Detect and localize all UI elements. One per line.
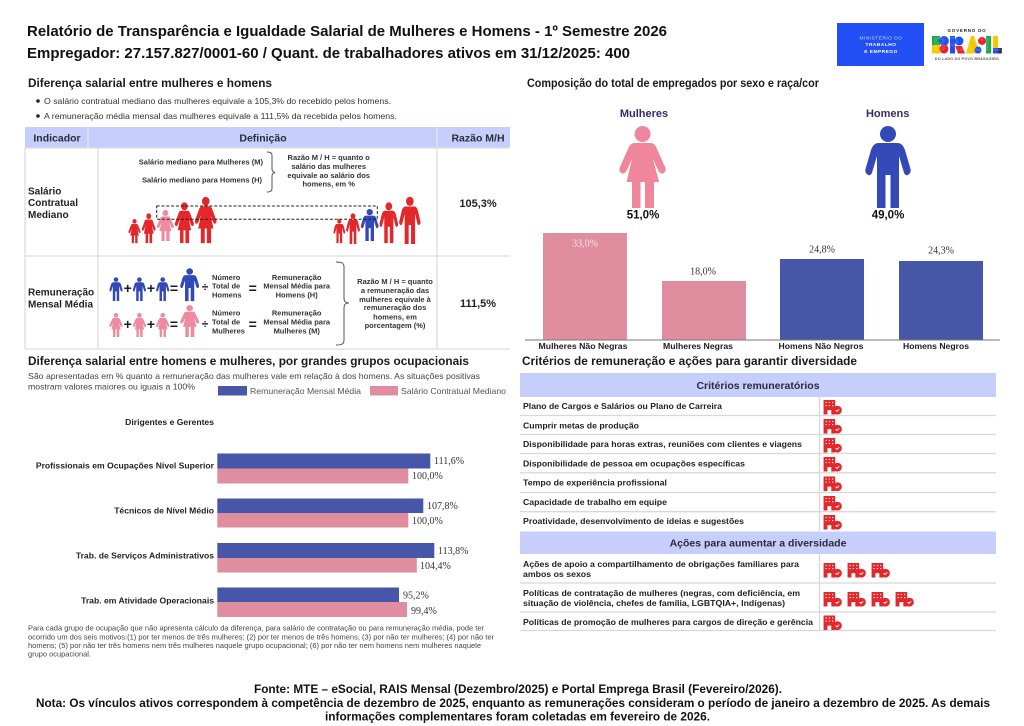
brace and ratio definition: remuneração dos — [364, 303, 426, 312]
text block: explicação: mostram valores maiores ou iguais a 100% — [28, 382, 195, 392]
legend — [218, 386, 506, 396]
group: Profissionais: 100,0% — [412, 471, 443, 482]
heading: grandes grupos: Diferença salarial entre homens e mulheres, por grandes grupos ocupacionais — [28, 354, 469, 368]
text block: nota do gráfico: ocorrido um dos seis motivos:(1) por ter menos de três mulheres; (2) por ter menos de três homens; (3) por não ter mulheres; (4) por não ter — [28, 632, 495, 642]
formula: mulheres: = — [170, 316, 178, 332]
group: Serviços Administrativos: 104,4% — [420, 561, 451, 572]
formula: mulheres: + — [147, 316, 155, 332]
formula: mulheres: ÷ — [202, 317, 209, 331]
row label: Salário Contratual Mediano: Mediano — [28, 210, 69, 221]
group: Técnicos — [114, 498, 458, 528]
formula: homens: = — [249, 280, 257, 296]
row label: Salário Contratual Mediano — [28, 186, 78, 221]
group: Atividade Operacionais — [81, 588, 437, 617]
brace and ratio definition: porcentagem (%) — [365, 321, 426, 330]
value: 105,3%: 105,3% — [459, 198, 497, 210]
bar chart: grupos ocupacionais: Dirigentes e Gerentes — [125, 417, 214, 427]
bar chart: composição: Mulheres Negras — [663, 341, 733, 351]
bar chart: composição — [525, 233, 1000, 351]
text block: nota do gráfico: Para cada grupo de ocupação que não apresenta cálculo da diferença, para salário de contratação ou para remuneração média, pode ter — [28, 624, 485, 632]
formula: mulheres: = — [249, 316, 257, 332]
group: Técnicos: Técnicos de Nível Médio — [114, 506, 214, 516]
icon group: homens — [865, 108, 911, 222]
formula: mulheres: Mensal Média para — [263, 318, 331, 326]
group: Atividade Operacionais: Trab. em Atividade Operacionais — [81, 596, 214, 606]
actions list: Políticas de promoção de mulheres para cargos de direção e gerência — [523, 617, 813, 627]
group: Profissionais: Profissionais em Ocupações Nível Superior — [36, 460, 215, 470]
icons: men by salary — [333, 197, 421, 244]
row label: Remuneração Mensal Média: Remuneração — [28, 288, 94, 298]
group: Serviços Administrativos: 113,8% — [438, 546, 468, 557]
heading: critérios: Critérios de remuneração e ações para garantir diversidade — [522, 354, 857, 368]
criteria list: Capacidade de trabalho em equipe — [523, 497, 667, 507]
row label: Salário Contratual Mediano: Salário — [28, 186, 61, 198]
definition: salário mediano text: homens, em % — [302, 180, 355, 188]
value: 111,5%: 111,5% — [460, 298, 496, 310]
group: Técnicos: 100,0% — [412, 516, 443, 527]
panel: indicator table — [25, 127, 510, 349]
row label: Remuneração Mensal Média: Mensal Média — [28, 300, 93, 310]
logo: Governo do Brasil: BRASIL — [933, 34, 1001, 56]
logo: Ministério do Trabalho e Emprego — [837, 23, 924, 66]
logo: Ministério do Trabalho e Emprego: MINISTÉRIO DO — [859, 34, 903, 42]
criteria list: Tempo de experiência profissional — [523, 478, 667, 488]
heading: diferença salarial: Diferença salarial entre mulheres e homens — [28, 76, 272, 90]
title: Empregador: 27.157.827/0001-60 / Quant. de trabalhadores ativos em 31/12/2025: 400 — [27, 45, 630, 62]
logo: Ministério do Trabalho e Emprego: TRABALHO — [866, 42, 896, 48]
criteria list: Disponibilidade para horas extras, reuniões com clientes e viagens — [523, 439, 802, 449]
brace and ratio definition: homens, em — [373, 312, 417, 322]
bar chart: composição: Homens Negros — [903, 341, 969, 351]
definition: salário mediano text: equivale ao salário dos — [287, 171, 370, 180]
formula: homens: Remuneração — [272, 273, 322, 282]
criteria list — [523, 401, 802, 526]
bar chart: composição: 24,3% — [928, 246, 954, 256]
text block: bullets — [36, 96, 397, 121]
footer: fonte e nota: informações complementares foram coletadas em fevereiro de 2026. — [325, 710, 710, 724]
legend: Remuneração Mensal Média — [250, 386, 361, 396]
formula: homens: + — [147, 280, 155, 296]
formula: mulheres: Remuneração — [272, 308, 322, 318]
group: Profissionais — [36, 454, 464, 484]
icon group: mulheres: 51,0% — [627, 210, 659, 222]
header: ações: Ações para aumentar a diversidade — [670, 538, 847, 550]
formula: homens: Homens (H) — [276, 290, 318, 300]
criteria list: Cumprir metas de produção — [523, 420, 639, 430]
table header: Definição — [239, 132, 287, 144]
table header: Razão M/H — [451, 132, 505, 144]
definition: salário mediano text: Salário mediano para Homens (H) — [142, 176, 263, 184]
group: Profissionais: 111,6% — [434, 456, 464, 467]
formula: mulheres: + — [124, 316, 132, 332]
bar chart: composição: 18,0% — [690, 266, 716, 278]
table header: Indicador — [33, 132, 81, 144]
bar chart: composição: 24,8% — [809, 244, 835, 256]
row label: Salário Contratual Mediano: Contratual — [28, 198, 78, 209]
group: Técnicos: 107,8% — [427, 501, 458, 512]
icon group: homens: 49,0% — [872, 210, 904, 222]
text block: explicação: São apresentadas em % quanto a remuneração das mulheres vale em relação à dos homens. As situações positivas — [28, 371, 480, 381]
formula: homens: Homens — [212, 290, 242, 300]
heading: composição: Composição do total de empregados por sexo e raça/cor — [527, 76, 819, 90]
text block: bullets: A remuneração média mensal das mulheres equivale a 111,5% da recebida pelos homens. — [44, 111, 397, 121]
formula: mulheres: Número — [212, 308, 241, 318]
definition: salário mediano text: Razão M / H = quanto o — [288, 153, 370, 162]
table header — [33, 132, 505, 144]
actions list: ambos os sexos — [523, 569, 591, 579]
group: Atividade Operacionais: 95,2% — [403, 590, 429, 602]
formula: homens — [109, 268, 331, 301]
text block: nota do gráfico: grupo ocupacional. — [28, 650, 91, 658]
icon group: homens: Homens — [866, 108, 909, 120]
text block: explicação — [28, 371, 480, 392]
formula: homens: ÷ — [202, 280, 209, 294]
definition: salário mediano text: Salário mediano para Mulheres (M) — [139, 158, 263, 166]
bar chart: composição: Mulheres Não Negras — [538, 341, 628, 351]
text block: nota do gráfico — [28, 624, 495, 658]
formula: homens: = — [170, 280, 178, 296]
icon group: mulheres: Mulheres — [620, 108, 668, 120]
icons: critérios — [824, 400, 842, 530]
group: Atividade Operacionais: 99,4% — [411, 606, 437, 617]
footer: fonte e nota — [36, 682, 990, 724]
formula: homens: + — [124, 280, 132, 296]
brace and ratio definition: Razão M / H = quanto — [357, 277, 433, 286]
legend: Salário Contratual Mediano — [401, 386, 506, 396]
icon group: mulheres — [619, 108, 668, 222]
formula: mulheres — [109, 305, 331, 337]
brace and ratio definition: mulheres equivale à — [359, 295, 432, 304]
logo: Governo do Brasil: DO LADO DO POVO BRASILEIRO — [935, 57, 999, 61]
actions list: Ações de apoio a compartilhamento de obrigações familiares para — [523, 559, 799, 569]
formula: homens: Mensal Média para — [263, 282, 331, 290]
bar chart: composição: 33,0% — [572, 238, 598, 250]
criteria list: Proatividade, desenvolvimento de ideias e sugestões — [523, 516, 744, 526]
actions list — [523, 559, 813, 627]
logo: Governo do Brasil: GOVERNO DO — [947, 28, 987, 33]
group: Serviços Administrativos: Trab. de Serviços Administrativos — [76, 550, 214, 560]
title — [27, 23, 667, 62]
group: Serviços Administrativos — [76, 543, 468, 572]
title: Relatório de Transparência e Igualdade Salarial de Mulheres e Homens - 1º Semestre 2026 — [27, 23, 667, 40]
logo: Ministério do Trabalho e Emprego: E EMPREGO — [864, 49, 898, 55]
actions list: Políticas de contratação de mulheres (negras, com deficiência, em — [523, 588, 800, 598]
icons: ações — [824, 563, 914, 630]
brace and ratio definition — [336, 262, 433, 345]
actions list: situação de violência, chefes de família, LGBTQIA+, Indígenas) — [523, 598, 785, 608]
logo: Governo do Brasil — [932, 28, 1002, 61]
text block: nota do gráfico: homens; (5) por não ter três homens nem três mulheres naquele grupo ocupacional; (6) por não ter nem homens nem mulheres naquele — [28, 641, 481, 650]
definition: salário mediano text: salário das mulheres — [291, 162, 366, 171]
formula: homens: Total de — [212, 282, 240, 290]
formula: mulheres: Total de — [212, 318, 240, 326]
footer: fonte e nota: Nota: Os vínculos ativos correspondem à competência de dezembro de 2025, enquanto as remunerações consideram o período de janeiro a dezembro de 2025. As demais — [36, 696, 990, 710]
formula: mulheres: Mulheres — [212, 326, 245, 336]
criteria list: Plano de Cargos e Salários ou Plano de Carreira — [523, 401, 722, 411]
brace and ratio definition: a remuneração das — [361, 286, 429, 295]
row label: Remuneração Mensal Média — [28, 288, 94, 310]
icons: women by salary — [128, 197, 217, 243]
footer: fonte e nota: Fonte: MTE – eSocial, RAIS Mensal (Dezembro/2025) e Portal Emprega Brasil (Fevereiro/2026). — [254, 682, 782, 696]
formula: mulheres: Mulheres (M) — [274, 326, 320, 336]
definition: salário mediano text — [139, 152, 370, 192]
formula: homens: Número — [212, 273, 241, 282]
criteria list: Disponibilidade de pessoa em ocupações específicas — [523, 458, 745, 468]
panel: critérios table — [520, 373, 996, 630]
bar chart: grupos ocupacionais — [36, 417, 468, 617]
text block: bullets: O salário contratual mediano das mulheres equivale a 105,3% do recebido pelos homens. — [44, 96, 391, 106]
bar chart: composição: Homens Não Negros — [778, 341, 864, 351]
header: critérios remuneratórios: Critérios remuneratórios — [696, 380, 820, 392]
